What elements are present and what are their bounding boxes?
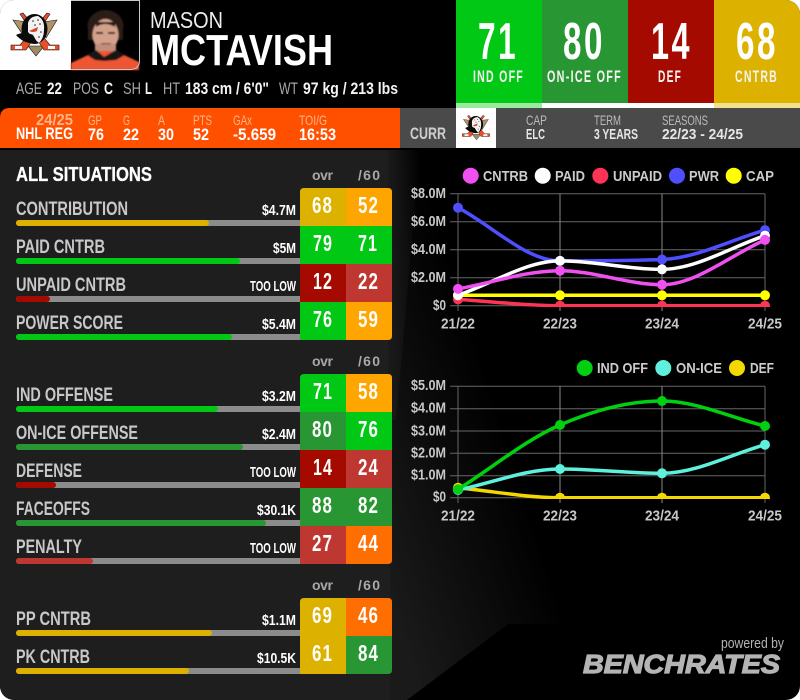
- row: pk cntrb: 84: [358, 640, 379, 666]
- y axis labels: chart 1: $8.0M: [411, 185, 446, 202]
- x axis labels: chart 1: 23/24: [645, 316, 680, 332]
- season stats bar: 22: [123, 125, 139, 144]
- row: paid cntrb: 79: [313, 230, 333, 256]
- rating group 2: [16, 374, 392, 564]
- x axis labels: chart 1: [441, 318, 782, 328]
- row: pp cntrb: PP CNTRB: [16, 609, 91, 630]
- brand: powered by benchrates: powered by: [721, 635, 784, 652]
- column headers: group 2: [312, 356, 380, 366]
- row: ind offense: 58: [358, 378, 379, 404]
- season stats bar: G: [123, 112, 130, 128]
- x axis labels: chart 2: 23/24: [645, 508, 680, 524]
- row: ind offense: IND OFFENSE: [16, 385, 113, 406]
- season stats bar: GP: [88, 112, 102, 128]
- player bio row: 183 cm / 6'0": [185, 79, 269, 98]
- row: pp cntrb: $1.1M: [262, 612, 296, 629]
- legend: chart 2: DEF: [750, 360, 774, 377]
- row: contribution: $4.7M: [262, 202, 296, 219]
- y axis labels: chart 2: $1.0M: [411, 467, 446, 484]
- row: paid cntrb: 71: [358, 230, 378, 256]
- season stats bar: A: [158, 112, 165, 128]
- row: defense: [16, 450, 392, 488]
- row: unpaid cntrb: UNPAID CNTRB: [16, 275, 126, 296]
- row: faceoffs: FACEOFFS: [16, 499, 90, 520]
- score tile: cntrb: 68: [736, 13, 778, 71]
- row: unpaid cntrb: 22: [358, 268, 379, 294]
- row: contribution: CONTRIBUTION: [16, 199, 128, 220]
- player bio row: 97 kg / 213 lbs: [303, 79, 398, 98]
- y axis labels: chart 1: $4.0M: [411, 241, 446, 258]
- data lines: chart 2: [453, 396, 770, 503]
- season stats bar: GAx: [233, 112, 252, 128]
- column headers: group 2: /60: [358, 353, 380, 369]
- contract bar: CAP: [526, 112, 547, 128]
- score tile: ind off: 71: [478, 13, 518, 71]
- contract bar: TERM: [594, 112, 621, 128]
- contract bar: SEASONS: [662, 112, 708, 128]
- x axis labels: chart 2: 24/25: [748, 508, 782, 524]
- row: faceoffs: 88: [312, 492, 333, 518]
- rating group 3: [16, 598, 392, 674]
- heading: all situations: ALL SITUATIONS: [16, 164, 152, 186]
- player name: MCTAVISH: [150, 26, 333, 75]
- y axis labels: chart 1: $6.0M: [411, 213, 446, 230]
- row: ind offense: 71: [313, 378, 333, 404]
- x axis labels: chart 1: 24/25: [748, 316, 782, 332]
- row: ind offense: $3.2M: [262, 388, 296, 405]
- x axis labels: chart 1: 21/22: [441, 316, 475, 332]
- row: paid cntrb: [16, 226, 392, 264]
- row: defense: 14: [313, 454, 333, 480]
- player name: MASON: [150, 7, 223, 33]
- row: unpaid cntrb: 12: [313, 268, 333, 294]
- row: pk cntrb: $10.5K: [257, 650, 296, 667]
- column headers: group 1: ovr: [312, 167, 334, 183]
- season stats bar: [0, 108, 400, 148]
- x axis labels: chart 1: 22/23: [543, 316, 577, 332]
- score tile: def: DEF: [658, 67, 682, 86]
- column headers: group 3: /60: [358, 577, 380, 593]
- row: on-ice offense: [16, 412, 392, 450]
- row: pk cntrb: PK CNTRB: [16, 647, 90, 668]
- season stats bar: 24/25: [36, 112, 73, 129]
- row: pk cntrb: [16, 636, 392, 674]
- legend: chart 1: PWR: [689, 168, 719, 185]
- y axis labels: chart 1: $2.0M: [411, 269, 446, 286]
- player photo: [71, 0, 140, 70]
- player name: [152, 12, 331, 66]
- player bio row: POS: [73, 79, 99, 98]
- row: unpaid cntrb: [16, 264, 392, 302]
- legend: chart 1: [463, 168, 774, 185]
- rating group 1: [16, 188, 392, 340]
- legend: chart 2: IND OFF: [597, 360, 648, 377]
- row: pk cntrb: 61: [312, 640, 333, 666]
- y axis labels: chart 2: $5.0M: [411, 377, 446, 394]
- y axis labels: chart 2: [411, 377, 446, 506]
- data lines: chart 1: [453, 203, 770, 311]
- contract bar: 3 YEARS: [594, 126, 638, 143]
- row: contribution: [16, 188, 392, 226]
- row: faceoffs: 82: [358, 492, 379, 518]
- season stats bar: PTS: [193, 112, 212, 128]
- y axis labels: chart 2: $3.0M: [411, 422, 446, 439]
- y axis labels: chart 2: $4.0M: [411, 400, 446, 417]
- x axis labels: chart 2: 21/22: [441, 508, 475, 524]
- row: faceoffs: [16, 488, 392, 526]
- player bio row: L: [145, 79, 152, 98]
- legend: chart 2: [577, 360, 774, 377]
- season stats bar: 76: [88, 125, 104, 144]
- row: on-ice offense: ON-ICE OFFENSE: [16, 423, 138, 444]
- row: power score: [16, 302, 392, 340]
- column headers: group 2: ovr: [312, 353, 334, 369]
- score tile: def: 14: [651, 13, 692, 71]
- row: pp cntrb: 69: [312, 602, 333, 628]
- row: defense: DEFENSE: [16, 461, 82, 482]
- row: unpaid cntrb: TOO LOW: [250, 278, 297, 295]
- contract bar: [400, 108, 800, 148]
- row: on-ice offense: 76: [358, 416, 379, 442]
- row: faceoffs: $30.1K: [257, 502, 296, 519]
- column headers: group 3: ovr: [312, 577, 334, 593]
- column headers: group 3: [312, 580, 380, 590]
- column headers: group 1: [312, 170, 380, 180]
- legend: chart 1: PAID: [555, 168, 585, 185]
- column headers: group 1: /60: [358, 167, 380, 183]
- score tile: on-ice off: [542, 0, 628, 108]
- row: defense: TOO LOW: [250, 464, 297, 481]
- contract bar: CURR: [410, 124, 446, 143]
- y axis labels: chart 2: $0: [433, 489, 446, 506]
- score tile: ind off: IND OFF: [473, 67, 524, 86]
- row: on-ice offense: $2.4M: [262, 426, 296, 443]
- season stats bar: 30: [158, 125, 174, 144]
- x axis labels: chart 2: 22/23: [543, 508, 577, 524]
- row: contribution: 68: [312, 192, 333, 218]
- row: penalty: [16, 526, 392, 564]
- row: power score: $5.4M: [262, 316, 296, 333]
- season stats bar: -5.659: [233, 125, 276, 144]
- score tile: ind off: [456, 0, 542, 108]
- row: contribution: 52: [358, 192, 379, 218]
- brand: powered by benchrates: [582, 637, 784, 674]
- row: penalty: PENALTY: [16, 537, 82, 558]
- season stats bar: TOI/G: [299, 112, 327, 128]
- brand: powered by benchrates: BENCHRATES: [583, 649, 781, 679]
- contract bar: 22/23 - 24/25: [662, 126, 743, 143]
- season stats bar: 52: [193, 125, 209, 144]
- panel: stats background: [0, 150, 514, 700]
- row: on-ice offense: 80: [312, 416, 333, 442]
- row: power score: 59: [358, 306, 379, 332]
- chart: offense and defense by season: [411, 360, 782, 524]
- row: defense: 24: [358, 454, 379, 480]
- row: penalty: TOO LOW: [250, 540, 297, 557]
- row: power score: POWER SCORE: [16, 313, 123, 334]
- row: paid cntrb: $5M: [273, 240, 296, 257]
- player bio row: AGE: [16, 79, 42, 98]
- score tile: cntrb: [714, 0, 800, 108]
- player bio row: C: [104, 79, 113, 98]
- score tile: def: [628, 0, 714, 108]
- legend: chart 2: ON-ICE: [676, 360, 722, 377]
- player bio row: WT: [279, 79, 298, 98]
- season stats bar: 16:53: [299, 125, 336, 144]
- y axis labels: chart 1: $0: [433, 297, 446, 314]
- legend: chart 1: UNPAID: [613, 168, 662, 185]
- score tile: on-ice off: 80: [563, 13, 605, 71]
- row: pp cntrb: 46: [358, 602, 379, 628]
- season stats bar: NHL REG: [16, 124, 73, 143]
- team logo: [0, 0, 71, 70]
- chart: contribution by season: [411, 168, 782, 332]
- x axis labels: chart 2: [441, 510, 782, 520]
- y axis labels: chart 2: $2.0M: [411, 445, 446, 462]
- y axis labels: chart 1: [411, 185, 446, 314]
- player bio row: 22: [47, 79, 62, 98]
- player bio row: SH: [123, 79, 141, 98]
- contract bar: ELC: [526, 126, 545, 143]
- legend: chart 1: CAP: [746, 168, 774, 185]
- row: power score: 76: [313, 306, 333, 332]
- row: penalty: 27: [312, 530, 333, 556]
- player bio row: HT: [163, 79, 180, 98]
- row: paid cntrb: PAID CNTRB: [16, 237, 105, 258]
- row: pp cntrb: [16, 598, 392, 636]
- score tile: on-ice off: ON-ICE OFF: [547, 67, 622, 86]
- player bio row: [16, 82, 398, 98]
- row: ind offense: [16, 374, 392, 412]
- row: penalty: 44: [358, 530, 379, 556]
- legend: chart 1: CNTRB: [483, 168, 528, 185]
